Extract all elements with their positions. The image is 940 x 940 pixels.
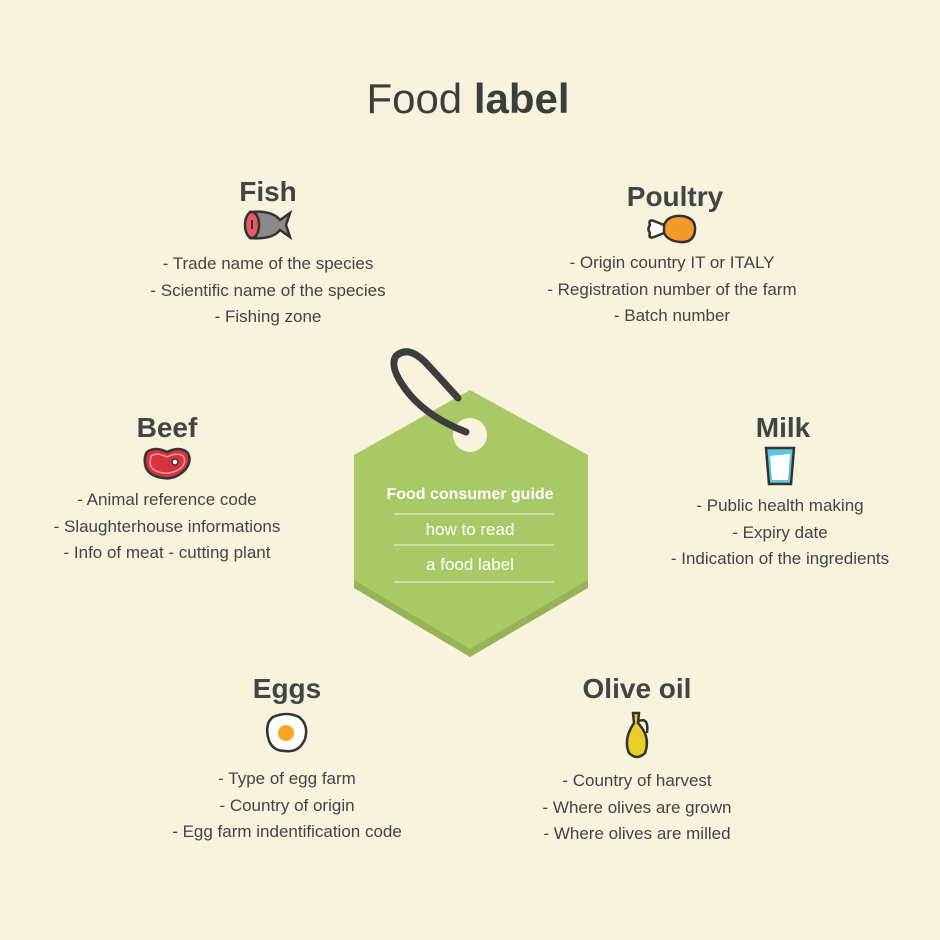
text: olive oil items: - Where olives are grown (543, 798, 731, 816)
text: milk items (671, 496, 889, 568)
heading: beef: Beef (137, 412, 197, 443)
icon: oil jug (626, 712, 649, 758)
text: poultry items: - Origin country IT or ITALY (569, 253, 774, 272)
text: poultry items: - Batch number (614, 306, 730, 325)
heading: poultry: Poultry (627, 181, 723, 212)
text: fish items (150, 254, 386, 326)
text: guide title: Food consumer guide (386, 486, 554, 503)
text: eggs items: - Type of egg farm (218, 769, 356, 788)
icon: steak (144, 448, 191, 480)
text: guide subtitle (426, 520, 514, 574)
icon: drumstick (647, 214, 696, 244)
text: fish items: - Fishing zone (215, 307, 321, 326)
panel: poultry (547, 181, 797, 325)
heading: olive oil: Olive oil (583, 673, 691, 704)
tag: center guide (354, 348, 588, 657)
text: milk items: - Public health making (696, 496, 864, 515)
title: Food label (366, 75, 570, 122)
text: beef items: - Animal reference code (77, 490, 257, 509)
text: eggs items (172, 769, 402, 841)
panel: eggs (172, 673, 402, 841)
panel: olive oil (543, 673, 731, 843)
text: guide subtitle: how to read (426, 520, 514, 539)
text: olive oil items (543, 771, 731, 843)
text: beef items (54, 490, 280, 562)
text: milk items: - Indication of the ingredients (671, 549, 889, 568)
icon: fish (244, 210, 292, 240)
text: olive oil items: - Country of harvest (562, 771, 712, 790)
text: poultry items: - Registration number of the farm (547, 280, 797, 298)
icon: fried egg (266, 712, 308, 752)
panel: beef (54, 412, 280, 562)
text: eggs items: - Country of origin (219, 796, 355, 814)
text: eggs items: - Egg farm indentification code (172, 822, 402, 841)
text: fish items: - Scientific name of the species (150, 280, 386, 300)
text: poultry items (547, 253, 797, 325)
panel: milk (671, 412, 889, 568)
icon: glass of milk (764, 446, 796, 486)
heading: fish: Fish (239, 176, 297, 207)
text: milk items: - Expiry date (732, 522, 828, 542)
text: olive oil items: - Where olives are milled (543, 824, 731, 843)
text: fish items: - Trade name of the species (163, 254, 373, 273)
panel: fish (150, 176, 386, 326)
heading: milk: Milk (756, 412, 810, 443)
text: beef items: - Info of meat - cutting plant (64, 543, 270, 562)
text: beef items: - Slaughterhouse informations (54, 516, 280, 536)
text: guide subtitle: a food label (426, 555, 514, 574)
heading: eggs: Eggs (253, 673, 321, 704)
